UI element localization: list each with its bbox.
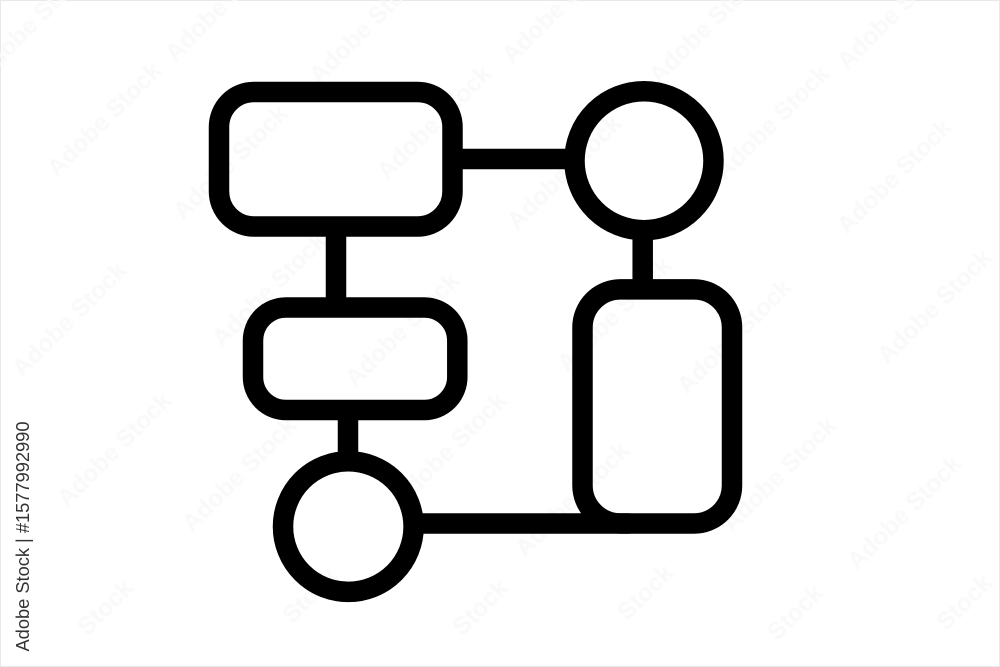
watermark pattern: Adobe Stock xyxy=(717,412,842,537)
connector: bottom circle to tall box xyxy=(413,513,630,534)
watermark pattern: Adobe Stock xyxy=(872,244,997,369)
watermark pattern: Stock xyxy=(278,562,344,629)
tall rounded box xyxy=(582,289,732,524)
watermark pattern: Adobe Stock xyxy=(842,450,967,575)
watermark pattern: Adobe Stock xyxy=(510,437,635,562)
watermark pattern: Stock xyxy=(613,559,679,626)
watermark pattern: Adobe Stock xyxy=(372,60,497,185)
top circle xyxy=(574,91,714,230)
watermark pattern: Stock xyxy=(448,574,514,641)
stock id text: Adobe Stock | #1577992990 xyxy=(12,422,33,652)
watermark pattern: Adobe Stock xyxy=(502,110,627,235)
watermark pattern: Adobe Stock xyxy=(710,60,835,185)
bottom circle xyxy=(283,461,414,592)
connector: top circle to tall box xyxy=(632,229,653,290)
watermark pattern: Adobe Stock xyxy=(52,387,177,512)
watermark pattern: Adobe Stock xyxy=(340,267,465,392)
watermark pattern: Adobe Stock xyxy=(672,274,797,399)
watermark pattern: Adobe Stock xyxy=(552,252,677,377)
watermark pattern: Stock xyxy=(73,574,139,641)
watermark pattern: Adobe Stock xyxy=(168,100,293,225)
watermark pattern: Adobe Stock xyxy=(177,412,302,537)
connector: middle box to bottom circle xyxy=(338,410,358,461)
watermark pattern: Adobe Stock xyxy=(42,57,167,182)
watermark pattern: Stock xyxy=(932,569,998,636)
top rounded box xyxy=(219,92,452,226)
watermark pattern: Adobe Stock xyxy=(207,227,332,352)
watermark pattern: Adobe Stock xyxy=(832,114,957,239)
icon: flowchart diagram xyxy=(219,91,732,592)
watermark pattern: Stock xyxy=(763,579,829,646)
watermark pattern: Adobe Stock xyxy=(7,257,132,382)
connector: top box to middle box xyxy=(326,226,346,308)
connector: top box to top circle xyxy=(451,149,574,169)
middle rounded box xyxy=(253,308,457,410)
watermark pattern: Adobe Stock xyxy=(387,387,512,512)
